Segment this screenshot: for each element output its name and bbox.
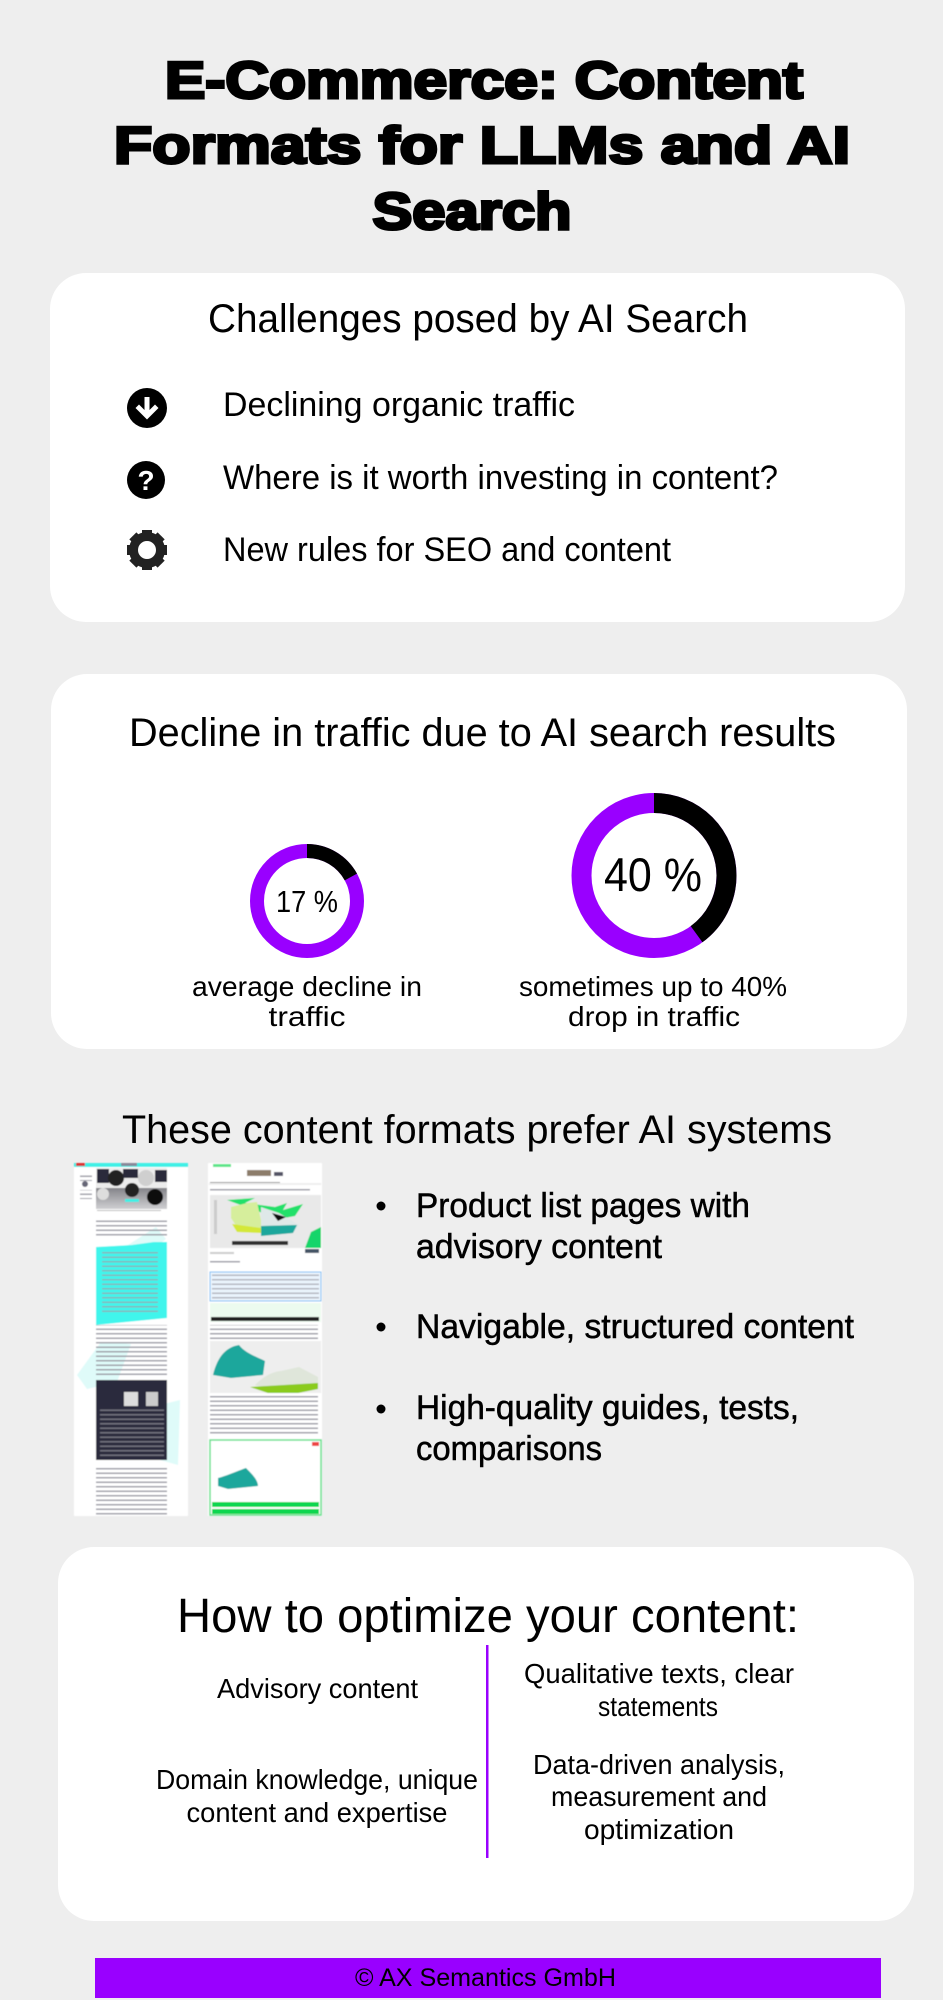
bullet list: content formats <box>376 1187 855 1468</box>
caption: up to 40 percent: sometimes up to 40% <box>519 971 787 1002</box>
donut chart: 40 percent: 40 % <box>604 848 702 901</box>
caption: up to 40 percent <box>519 971 787 1032</box>
heading: how to optimize: How to optimize your content: <box>177 1590 799 1643</box>
footer bar: © AX Semantics GmbH <box>355 1964 616 1992</box>
title: E-Commerce: Content <box>165 52 803 110</box>
text: domain knowledge: content and expertise <box>186 1797 448 1828</box>
heading: challenges: Challenges posed by AI Search <box>208 297 748 341</box>
bullet: product list pages: Product list pages with <box>416 1187 750 1225</box>
text: declining organic traffic: Declining organic traffic <box>223 386 575 424</box>
caption: average decline <box>192 971 422 1032</box>
caption: average decline: average decline in <box>192 971 422 1002</box>
text: qualitative texts: Qualitative texts, clear <box>524 1658 794 1689</box>
text: domain knowledge: Domain knowledge, unique <box>156 1764 478 1795</box>
screenshot: appliance article <box>74 1163 188 1516</box>
panel: decline in traffic <box>51 674 907 1049</box>
text: data-driven analysis: measurement and <box>551 1781 767 1812</box>
text: qualitative texts <box>524 1658 794 1722</box>
bullet: navigable content: Navigable, structured content <box>416 1308 855 1346</box>
text: data-driven analysis: Data-driven analysis, <box>533 1749 785 1780</box>
bullet: product list pages: advisory content <box>416 1228 663 1266</box>
heading: content formats: These content formats prefer AI systems <box>122 1108 832 1152</box>
text: data-driven analysis: optimization <box>584 1814 734 1845</box>
footer bar <box>95 1958 881 1998</box>
screenshot: running shoes article <box>208 1163 322 1516</box>
bullet: guides, tests, comparisons: High-quality guides, tests, <box>416 1389 799 1427</box>
heading: decline in traffic: Decline in traffic due to AI search results <box>129 711 836 755</box>
bullet: guides, tests, comparisons: comparisons <box>416 1430 602 1468</box>
text: advisory content: Advisory content <box>217 1673 418 1704</box>
icon: down arrow circle <box>127 388 167 428</box>
donut chart: 40 percent <box>582 803 726 948</box>
bullet: guides, tests, comparisons <box>376 1389 799 1468</box>
text: domain knowledge <box>156 1764 478 1828</box>
panel: how to optimize <box>58 1547 914 1921</box>
text: qualitative texts: statements <box>598 1691 718 1722</box>
caption: up to 40 percent: drop in traffic <box>568 1001 740 1032</box>
icon: question circle <box>127 461 165 499</box>
panel: challenges posed by AI search <box>50 273 905 622</box>
icon: gear <box>127 530 167 570</box>
donut chart: 17 percent <box>257 851 357 951</box>
title: Search <box>372 183 572 241</box>
bullet: product list pages <box>376 1187 750 1266</box>
icon: question circle: ? <box>137 465 155 496</box>
text: data-driven analysis <box>533 1749 785 1845</box>
donut chart: 17 percent: 17 % <box>276 884 338 919</box>
caption: average decline: traffic <box>268 1001 346 1032</box>
text: where to invest: Where is it worth investing in content? <box>223 459 778 497</box>
title: Formats for LLMs and AI <box>114 117 850 175</box>
title <box>114 52 850 241</box>
text: new rules: New rules for SEO and content <box>223 531 672 569</box>
